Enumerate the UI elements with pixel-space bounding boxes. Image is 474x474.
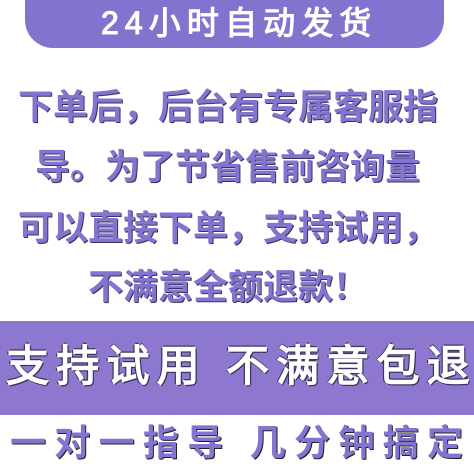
text line 3: 可以直接下单，支持试用，	[18, 209, 438, 248]
text line 2: 导。为了节省售前咨询量	[35, 148, 420, 187]
text line 4: 不满意全额退款！	[88, 268, 368, 307]
text block: service description	[18, 88, 438, 307]
footer slogan: one-on-one guidance: 一对一指导 几分钟搞定	[10, 422, 471, 463]
heading: 24-hour automatic delivery: 24小时自动发货	[101, 5, 377, 41]
band slogan: trial supported, refund if unsatisfied: 支持试用 不满意包退	[6, 343, 474, 391]
header banner	[25, 0, 444, 48]
purple band	[0, 321, 474, 415]
text line 1: 下单后，后台有专属客服指	[18, 88, 438, 127]
